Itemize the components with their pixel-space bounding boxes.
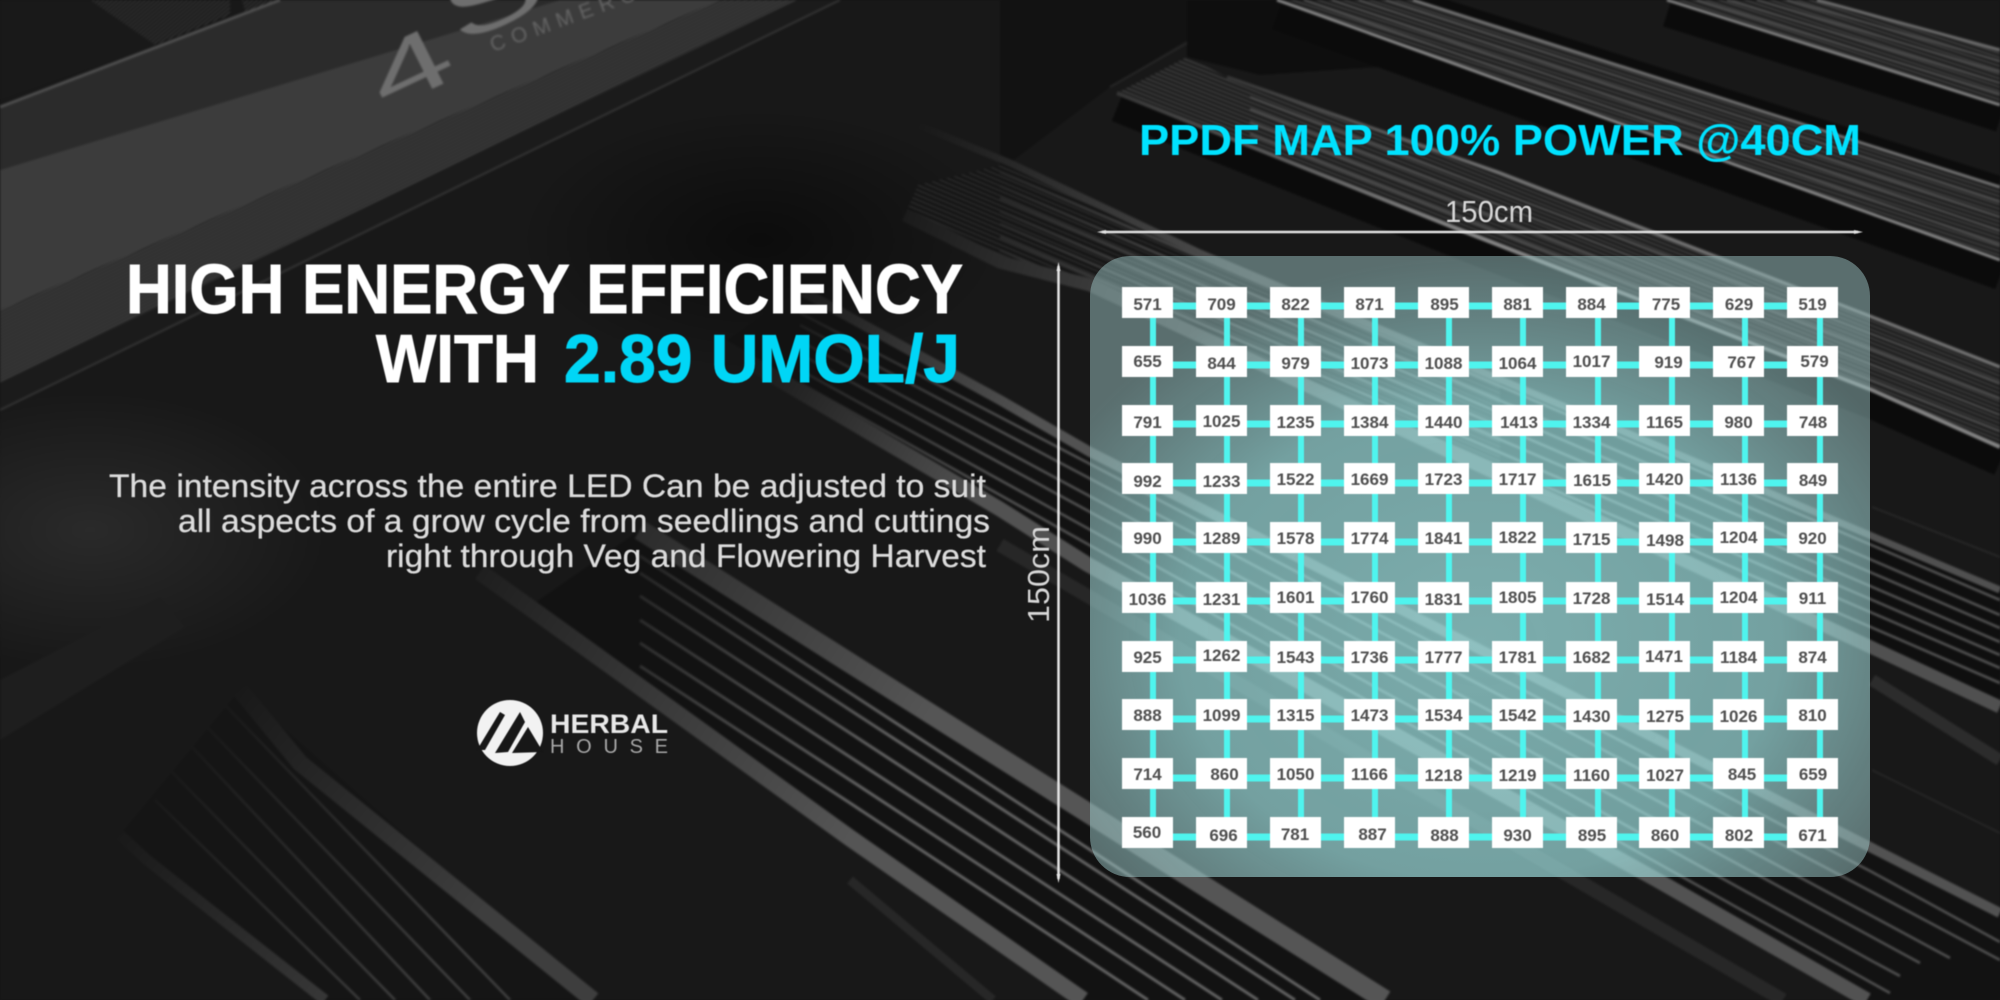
- row 8 values: 1542: [1499, 706, 1536, 725]
- vertical dimension: 150cm: 150cm: [1021, 526, 1056, 623]
- row 1 values: 881: [1503, 295, 1532, 314]
- row 3 values: 1413: [1500, 413, 1538, 432]
- fixture lettering: 4: 4: [350, 6, 469, 127]
- background slat, centre to lower right: [720, 290, 2000, 1000]
- map background panel: [1090, 256, 1870, 877]
- row 6 values: 1728: [1573, 589, 1610, 608]
- row 3 values: 1165: [1646, 413, 1683, 432]
- row 7 values: 925: [1133, 648, 1162, 667]
- description paragraph: right through Veg and Flowering Harvest: [386, 538, 986, 574]
- row 8 values: 1315: [1277, 706, 1314, 725]
- row 4 values: 1615: [1573, 471, 1611, 490]
- description paragraph: [109, 468, 990, 574]
- row 9 values: [1122, 758, 1838, 789]
- row 10 values: 560: [1133, 823, 1161, 842]
- row 2 values: 1088: [1425, 354, 1462, 373]
- row 10 values: 802: [1725, 826, 1753, 845]
- row 4 values: 992: [1133, 472, 1162, 491]
- row 2 values: 1073: [1351, 354, 1388, 373]
- row 6 values: 1831: [1425, 590, 1462, 609]
- row 10 values: 930: [1503, 826, 1532, 845]
- row 9 values: 1166: [1351, 765, 1388, 784]
- row 1 values: 884: [1577, 295, 1606, 314]
- row 5 values: 1289: [1203, 529, 1240, 548]
- LED fixture bar with model marking: [0, 0, 840, 410]
- row 8 values: 1430: [1573, 707, 1610, 726]
- row 10 values: [1122, 817, 1838, 848]
- row 1 values: 871: [1355, 295, 1384, 314]
- map title: PPDF MAP 100% POWER @40CM: [1139, 116, 1861, 165]
- row 2 values: 844: [1207, 354, 1236, 373]
- row 1 values: 519: [1798, 295, 1827, 314]
- row 7 values: 1682: [1573, 648, 1610, 667]
- row 5 values: 920: [1798, 529, 1827, 548]
- row 8 values: 1534: [1425, 706, 1463, 725]
- row 9 values: 1050: [1277, 765, 1314, 784]
- heading: WITH: [376, 321, 539, 397]
- panel: PPDF map: [1090, 256, 1870, 877]
- row 9 values: 659: [1799, 765, 1827, 784]
- row 5 values: 1841: [1425, 529, 1462, 548]
- row 10 values: 887: [1358, 825, 1387, 844]
- row 4 values: [1122, 463, 1838, 494]
- row 7 values: [1122, 641, 1838, 672]
- row 10 values: 860: [1651, 826, 1679, 845]
- row 5 values: [1122, 522, 1838, 553]
- row 7 values: 1736: [1351, 648, 1388, 667]
- row 9 values: 714: [1133, 765, 1162, 784]
- background slat, bottom left: [120, 690, 593, 1000]
- row 6 values: 1514: [1646, 590, 1684, 609]
- logo wordmark: HERBAL: [550, 709, 668, 739]
- row 7 values: 1777: [1425, 648, 1462, 667]
- row 5 values: 1498: [1646, 531, 1684, 550]
- row 4 values: 849: [1799, 471, 1827, 490]
- row 6 values: 911: [1799, 589, 1826, 608]
- row 10 values: 895: [1578, 826, 1606, 845]
- horizontal dimension: 150cm: [1097, 194, 1863, 234]
- row 10 values: 888: [1430, 826, 1459, 845]
- row 9 values: 845: [1728, 765, 1756, 784]
- row 6 values: 1231: [1203, 590, 1240, 609]
- row 3 values: 1440: [1425, 413, 1462, 432]
- row 8 values: 1099: [1203, 706, 1240, 725]
- row 9 values: 860: [1210, 765, 1239, 784]
- row 7 values: 1262: [1203, 646, 1240, 665]
- row 2 values: 979: [1281, 354, 1310, 373]
- row 9 values: 1219: [1499, 766, 1536, 785]
- row 6 values: 1036: [1129, 590, 1166, 609]
- row 1 values: 571: [1133, 295, 1162, 314]
- row 4 values: 1136: [1720, 470, 1757, 489]
- row 8 values: 1473: [1351, 706, 1388, 725]
- map values grid: [1122, 287, 1838, 848]
- row 6 values: 1601: [1277, 588, 1314, 607]
- row 6 values: 1805: [1499, 588, 1536, 607]
- row 3 values: 1334: [1573, 413, 1611, 432]
- row 5 values: 1204: [1720, 528, 1758, 547]
- row 3 values: 748: [1799, 413, 1827, 432]
- row 2 values: 579: [1800, 352, 1829, 371]
- row 10 values: 781: [1281, 825, 1309, 844]
- row 3 values: 791: [1133, 413, 1162, 432]
- background slat, bottom centre: [480, 530, 1385, 1000]
- heading: HIGH ENERGY EFFICIENCY: [126, 250, 963, 328]
- row 6 values: 1760: [1351, 588, 1388, 607]
- row 8 values: 1026: [1720, 707, 1757, 726]
- row 7 values: 1471: [1645, 647, 1683, 666]
- row 3 values: 980: [1724, 413, 1753, 432]
- row 7 values: 1781: [1499, 648, 1536, 667]
- row 10 values: 671: [1798, 826, 1827, 845]
- row 2 values: 919: [1654, 353, 1683, 372]
- row 4 values: 1669: [1351, 470, 1388, 489]
- row 3 values: 1235: [1277, 413, 1314, 432]
- icon: logo mountain badge: [477, 700, 543, 766]
- row 4 values: 1723: [1425, 470, 1462, 489]
- row 3 values: 1025: [1203, 412, 1240, 431]
- row 5 values: 990: [1133, 529, 1162, 548]
- logo wordmark: [550, 709, 668, 758]
- map grid connecting lines: [1147, 302, 1820, 837]
- row 2 values: 655: [1133, 352, 1162, 371]
- row 3 values: [1122, 405, 1838, 436]
- row 5 values: 1822: [1499, 528, 1536, 547]
- row 7 values: 1184: [1720, 648, 1757, 667]
- row 1 values: 822: [1281, 295, 1310, 314]
- row 1 values: 895: [1430, 295, 1459, 314]
- row 5 values: 1578: [1277, 529, 1314, 548]
- row 4 values: 1233: [1203, 472, 1240, 491]
- row 1 values: 709: [1207, 295, 1236, 314]
- row 2 values: 1064: [1499, 354, 1537, 373]
- row 4 values: 1717: [1499, 470, 1536, 489]
- row 6 values: 1204: [1720, 588, 1758, 607]
- row 2 values: 1017: [1573, 352, 1610, 371]
- row 7 values: 874: [1798, 648, 1827, 667]
- row 4 values: 1420: [1646, 470, 1683, 489]
- logo wordmark: HOUSE: [550, 736, 668, 758]
- row 9 values: 1027: [1646, 766, 1684, 785]
- row 9 values: 1160: [1573, 766, 1610, 785]
- row 10 values: 696: [1209, 826, 1238, 845]
- row 2 values: 767: [1727, 353, 1756, 372]
- background slat behind the map: [905, 125, 2000, 833]
- background slats, upper right: [1110, 0, 2000, 462]
- row 6 values: [1122, 582, 1838, 613]
- row 1 values: 629: [1725, 295, 1753, 314]
- row 8 values: 810: [1798, 706, 1827, 725]
- heading: 2.89 UMOL/J: [564, 321, 960, 397]
- row 5 values: 1715: [1573, 530, 1610, 549]
- vertical dimension: 150cm: [1021, 262, 1060, 883]
- horizontal dimension: 150cm: 150cm: [1445, 194, 1533, 229]
- row 3 values: 1384: [1351, 413, 1389, 432]
- row 8 values: [1122, 699, 1838, 730]
- row 1 values: 775: [1652, 295, 1680, 314]
- row 7 values: 1543: [1277, 648, 1314, 667]
- row 2 values: [1122, 346, 1838, 377]
- row 1 values: [1122, 287, 1838, 318]
- row 5 values: 1774: [1351, 529, 1389, 548]
- row 4 values: 1522: [1277, 470, 1314, 489]
- heading: [126, 250, 963, 397]
- description paragraph: The intensity across the entire LED Can be adjusted to suit: [109, 468, 986, 504]
- logo: Herbal House: [477, 700, 668, 766]
- row 9 values: 1218: [1425, 766, 1462, 785]
- row 8 values: 888: [1133, 706, 1162, 725]
- description paragraph: all aspects of a grow cycle from seedlings and cuttings: [178, 503, 990, 539]
- row 8 values: 1275: [1646, 707, 1684, 726]
